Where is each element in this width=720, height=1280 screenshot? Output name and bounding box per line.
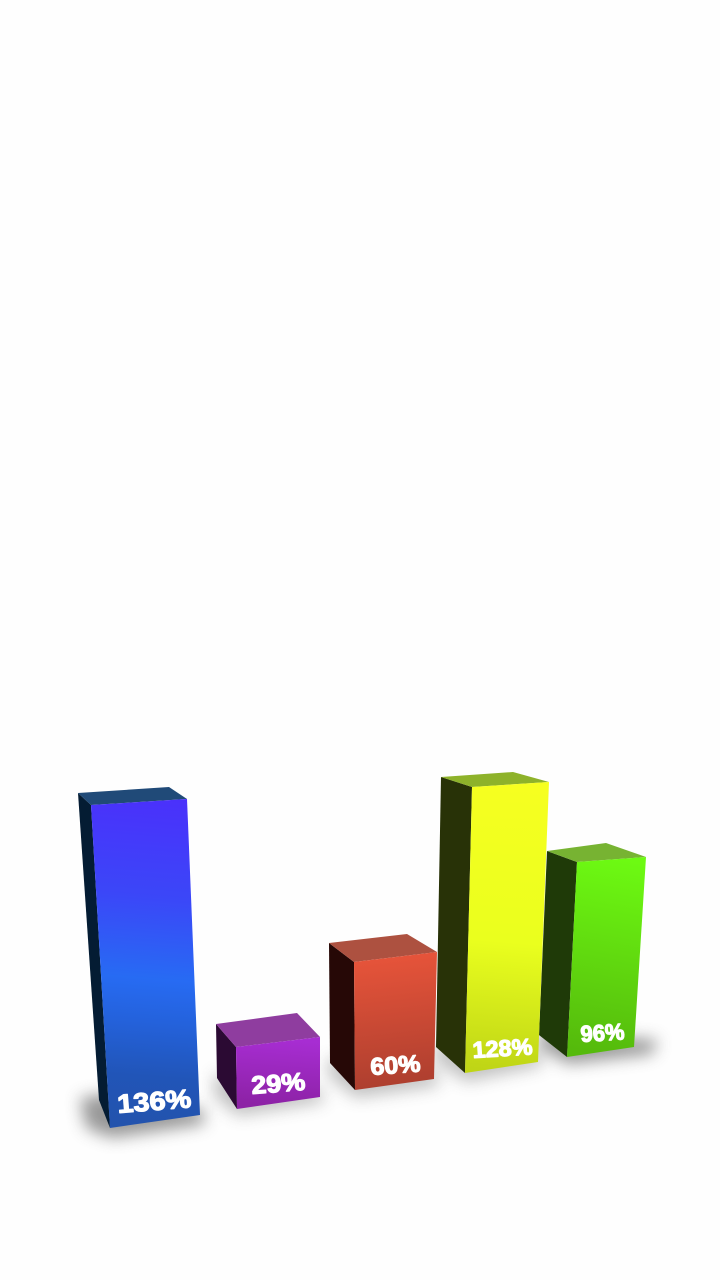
bar: green 96% <box>539 843 646 1057</box>
label: 136%: 136% <box>116 1083 192 1119</box>
bar: purple 29% <box>216 1013 320 1109</box>
label: 96%: 96% <box>580 1018 625 1047</box>
bar: yellow 128% <box>436 772 549 1073</box>
floor shadows <box>80 1032 658 1138</box>
bar: blue 136% <box>78 787 200 1128</box>
bar: red 60% <box>329 934 437 1090</box>
label: 60%: 60% <box>370 1051 421 1081</box>
label: 128%: 128% <box>472 1033 533 1063</box>
label: 29%: 29% <box>250 1068 306 1100</box>
